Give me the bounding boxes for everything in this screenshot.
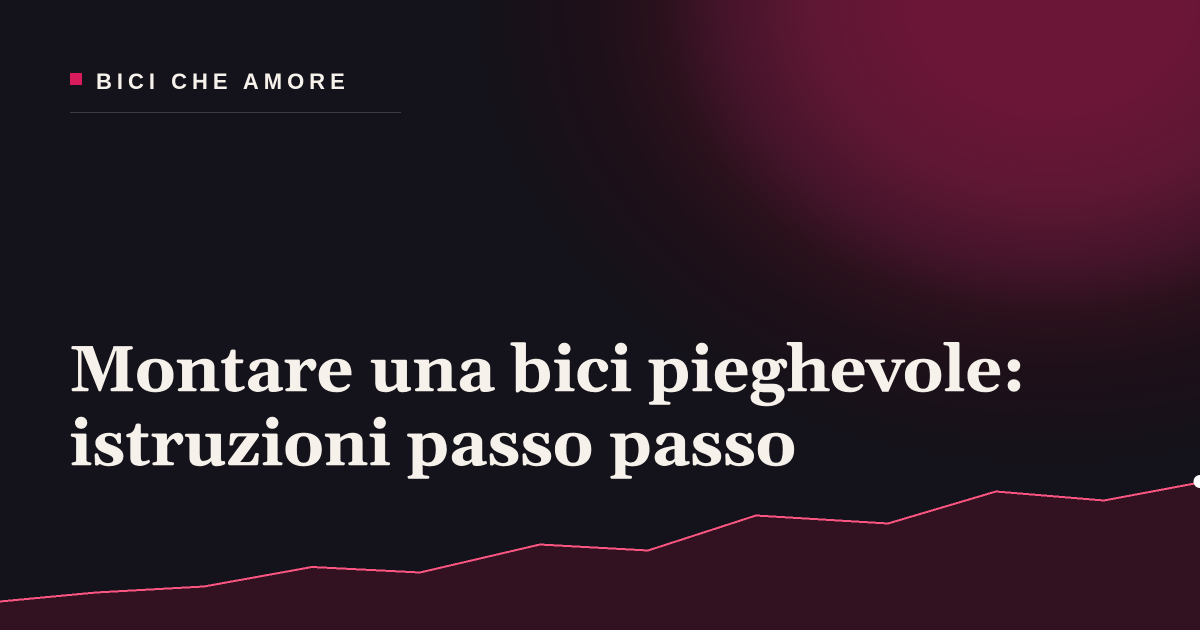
title: Montare una bici pieghevole: xyxy=(70,332,1026,413)
chart area fill xyxy=(0,482,1200,630)
brand header xyxy=(70,68,401,113)
brand name: BICI CHE AMORE xyxy=(96,69,350,94)
icon: brand square xyxy=(70,73,82,85)
title: istruzioni passo passo xyxy=(70,406,796,487)
chart line xyxy=(0,482,1200,602)
end point marker xyxy=(1194,475,1200,488)
title xyxy=(70,332,1026,487)
